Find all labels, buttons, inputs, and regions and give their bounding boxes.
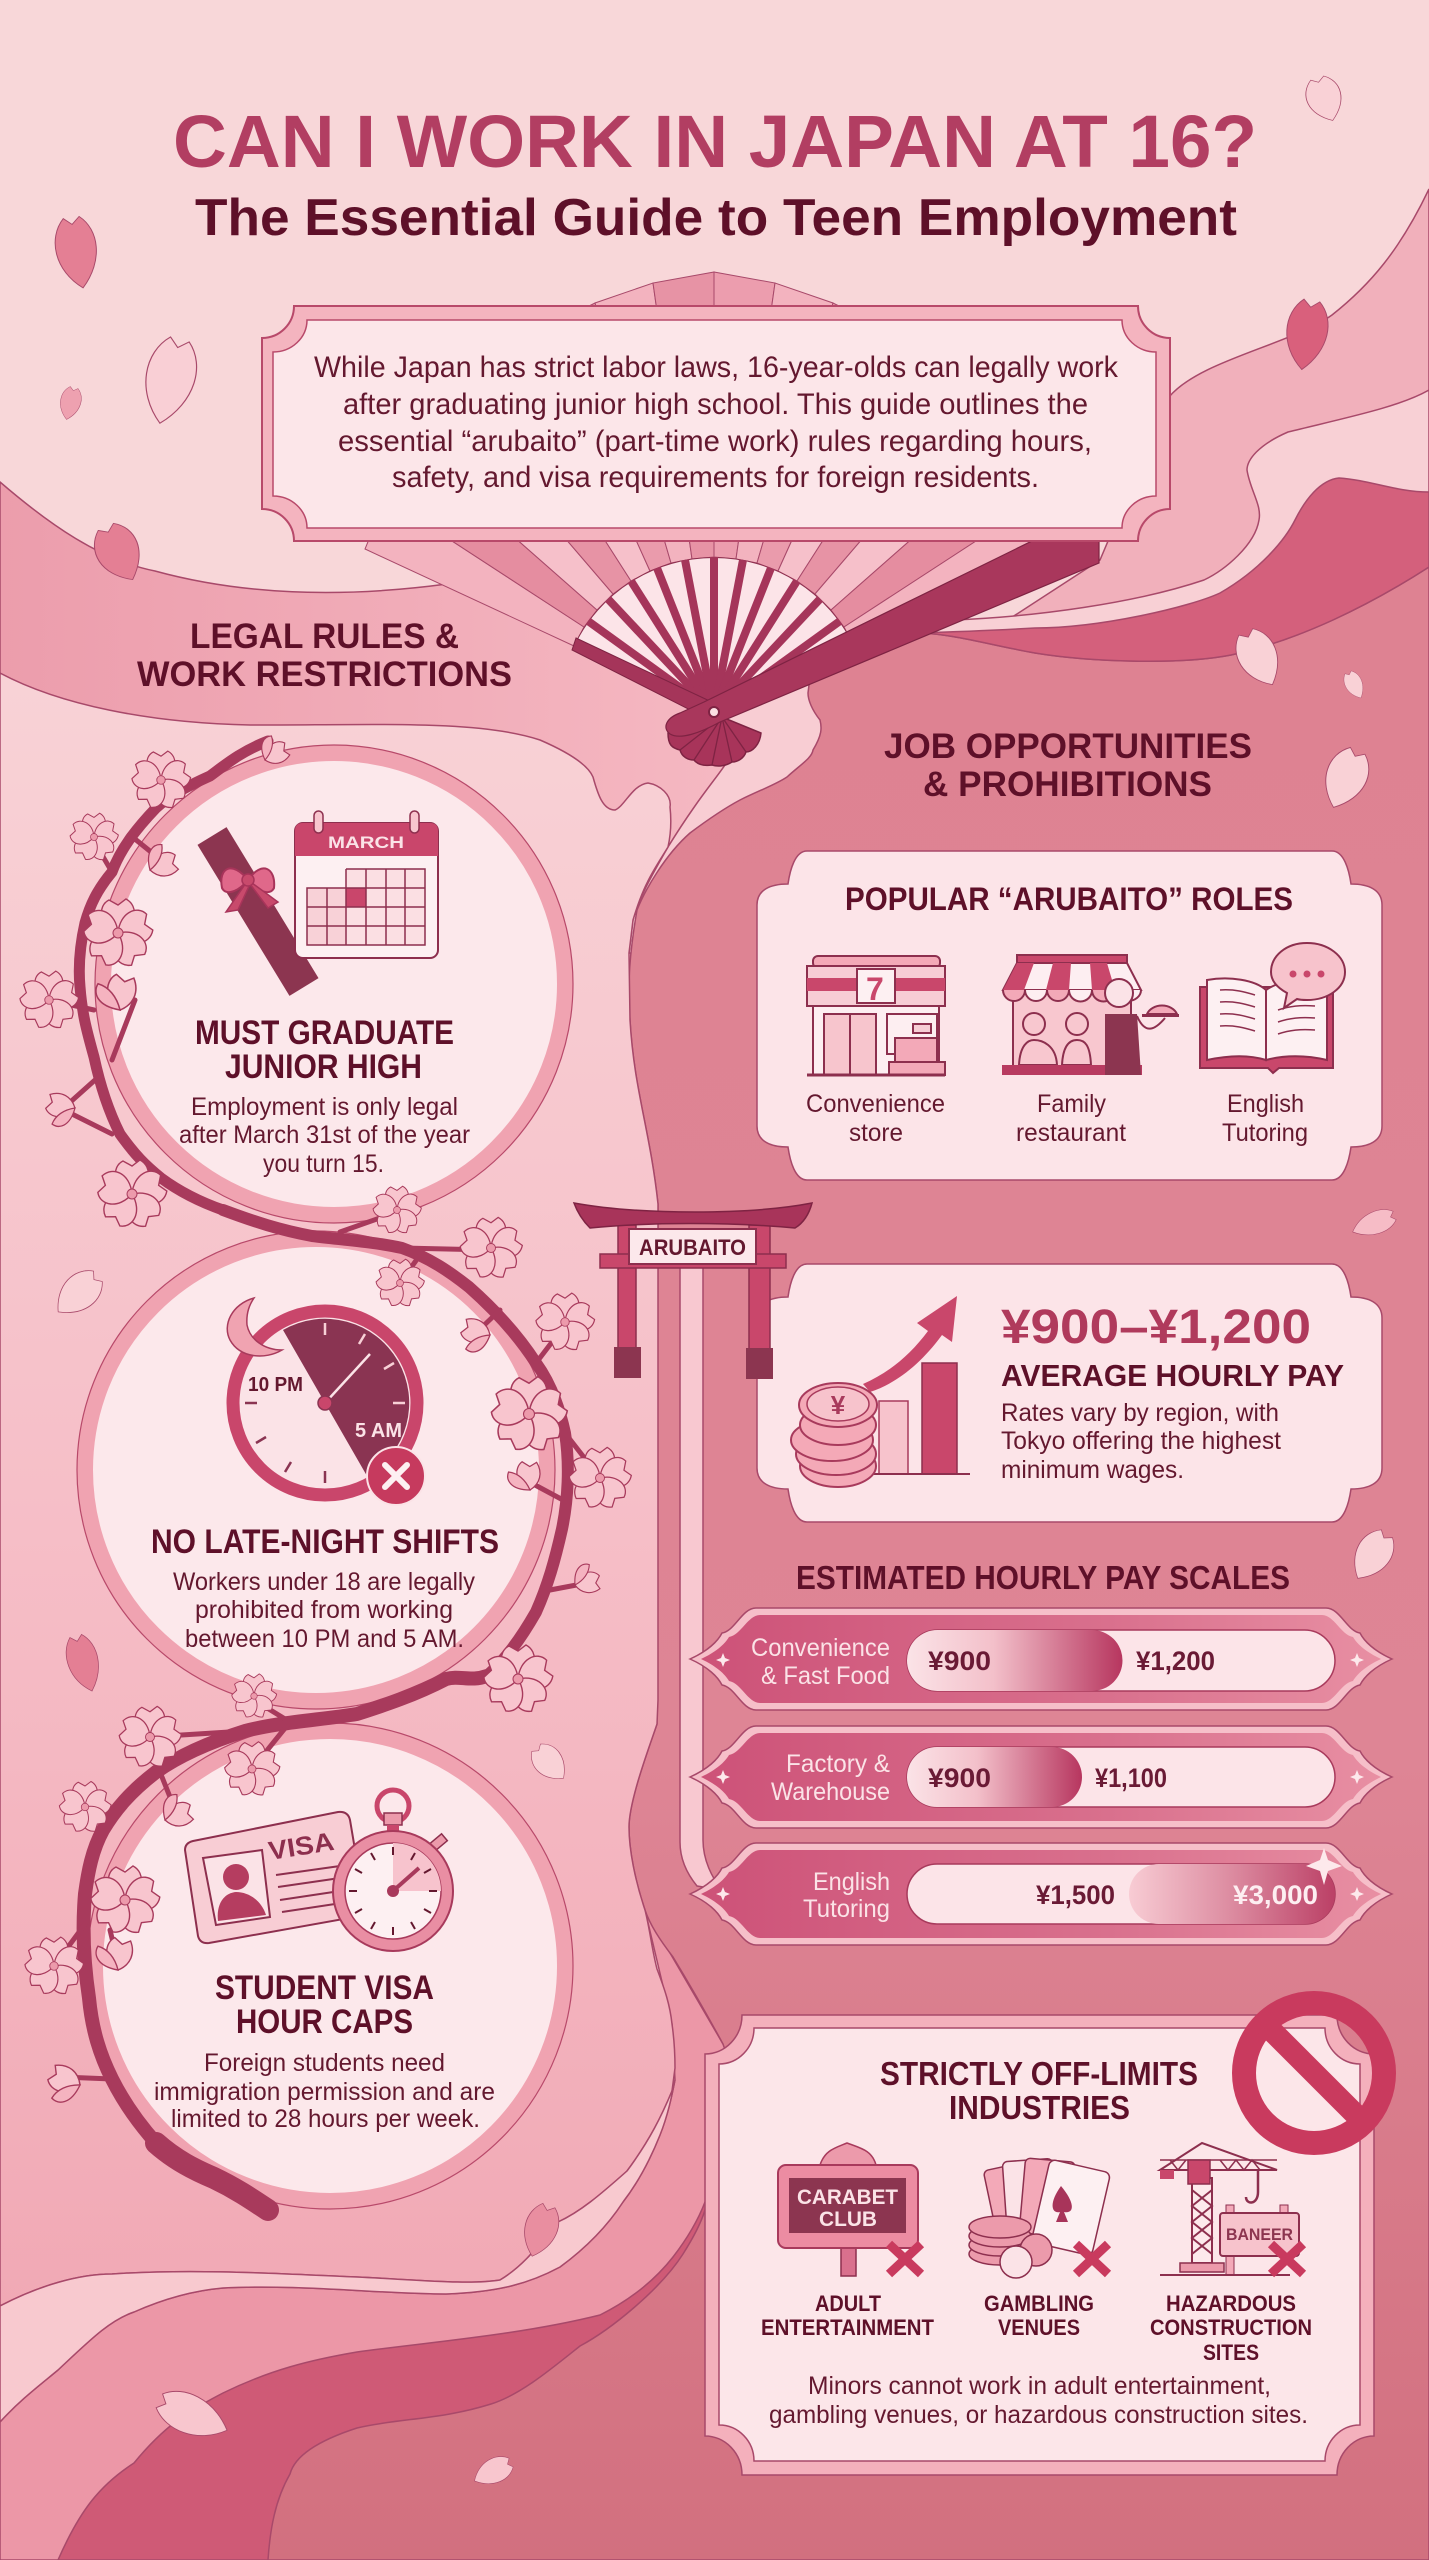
text: student visa: [154, 1969, 495, 2133]
industry labels: SITES: [1203, 2340, 1259, 2365]
intro panel: While Japan has strict labor laws, 16-year-olds can legally work: [314, 351, 1119, 384]
panel: student visa: [87, 1723, 573, 2209]
folding fan: [365, 272, 1099, 766]
role labels: [806, 1090, 1308, 1147]
torii gate: [574, 1203, 812, 1379]
heading: legal rules: [137, 617, 512, 694]
icon: clock: 5 AM: [355, 1420, 402, 1442]
industry labels: ENTERTAINMENT: [761, 2315, 935, 2340]
icon: family restaurant: [1002, 955, 1179, 1075]
pay row: convenience: Convenience: [751, 1634, 890, 1662]
icon: March calendar: MARCH: [328, 833, 404, 852]
pay figures: Rates vary by region, with: [1001, 1399, 1279, 1427]
heading: job opportunities: & PROHIBITIONS: [923, 765, 1212, 804]
blossoms upper: [17, 731, 292, 1231]
pay figures: AVERAGE HOURLY PAY: [1001, 1358, 1344, 1393]
industry labels: HAZARDOUS: [1166, 2291, 1296, 2316]
text: student visa: STUDENT VISA: [215, 1969, 434, 2007]
role labels: Family: [1037, 1090, 1106, 1118]
sparkle: [1306, 1848, 1342, 1885]
pay row: English tutoring: ¥3,000: [1233, 1880, 1318, 1910]
heading: legal rules: LEGAL RULES &: [190, 617, 459, 656]
panel: popular roles: POPULAR “ARUBAITO” ROLES: [845, 881, 1293, 917]
icon: construction crane: BANEER: [1226, 2225, 1293, 2244]
panel: off-limits industries: [705, 2003, 1384, 2475]
icon: clock: [227, 1298, 425, 1505]
pay figures: [1001, 1301, 1344, 1484]
left panel: [0, 673, 675, 2306]
pay row: factory: [690, 1726, 1392, 1828]
pay row: convenience: ¥900: [928, 1646, 991, 1676]
wave: bottom mid band: [0, 1910, 780, 2560]
icon: convenience store: 7: [866, 971, 884, 1007]
intro panel: essential “arubaito” (part-time work) rules regarding hours,: [338, 425, 1092, 458]
text: must graduate: JUNIOR HIGH: [225, 1048, 422, 1086]
wave: top right dark band: [917, 478, 1429, 661]
pay row: factory: ¥900: [928, 1763, 991, 1793]
icon: stopwatch: [333, 1790, 453, 1951]
text: student visa: limited to 28 hours per week.: [171, 2105, 480, 2133]
panel: average hourly pay: [757, 1264, 1382, 1522]
icon: coins and bar chart: [791, 1296, 970, 1487]
icon: open book with speech bubble: [1200, 943, 1345, 1073]
icon: diploma: [212, 836, 304, 987]
note text: [769, 2372, 1308, 2429]
panel heading: STRICTLY OFF-LIMITS: [880, 2055, 1198, 2092]
text: student visa: HOUR CAPS: [236, 2003, 413, 2041]
title: CAN I WORK IN JAPAN AT 16?: [173, 100, 1257, 183]
path strip below torii: [680, 1250, 722, 1890]
text: no late-night shifts: prohibited from working: [195, 1596, 453, 1624]
cherry branch: [17, 731, 634, 2210]
wave: top right pale strip: [917, 390, 1429, 640]
text: student visa: immigration permission and are: [154, 2078, 495, 2106]
icon: cabaret sign: CLUB: [819, 2208, 877, 2231]
pay row: English tutoring: English: [813, 1868, 890, 1896]
role labels: store: [849, 1119, 903, 1147]
wave: left upper band: [0, 482, 725, 900]
pay row: factory: ¥1,100: [1095, 1763, 1167, 1793]
icon: visa card: [185, 1812, 366, 1943]
icon: visa card: VISA: [266, 1826, 336, 1866]
industry labels: ADULT: [815, 2291, 881, 2316]
icon: cabaret sign: [778, 2143, 921, 2276]
text: must graduate: after March 31st of the year: [179, 1121, 470, 1149]
icon: prohibition sign: [1244, 2003, 1384, 2143]
text: student visa: Foreign students need: [204, 2049, 445, 2077]
pay row: convenience: ¥1,200: [1136, 1646, 1215, 1676]
text: no late-night shifts: NO LATE-NIGHT SHIFTS: [151, 1523, 499, 1561]
heading: legal rules: WORK RESTRICTIONS: [137, 655, 512, 694]
pay row: English tutoring: [690, 1843, 1392, 1945]
icon: March calendar: [295, 811, 438, 958]
intro panel: [262, 306, 1170, 541]
pay row: English tutoring: ¥1,500: [1036, 1880, 1115, 1910]
role labels: Convenience: [806, 1090, 945, 1118]
panel heading: [880, 2055, 1198, 2126]
industry labels: [761, 2291, 1312, 2365]
subtitle: The Essential Guide to Teen Employment: [195, 189, 1237, 247]
panel: must graduate: [95, 745, 573, 1223]
icon: gambling cards and chips: [969, 2158, 1111, 2278]
pale area under fan: [629, 633, 917, 960]
industry labels: VENUES: [998, 2315, 1080, 2340]
text: no late-night shifts: between 10 PM and 5 AM.: [185, 1625, 464, 1653]
wave: top right band: [917, 189, 1429, 640]
note text: gambling venues, or hazardous construction sites.: [769, 2401, 1308, 2429]
heading: job opportunities: JOB OPPORTUNITIES: [884, 727, 1252, 766]
pay row: convenience: [690, 1608, 1392, 1710]
panel: popular roles: [757, 851, 1382, 1180]
icon: clock: 10 PM: [248, 1374, 303, 1396]
pay figures: minimum wages.: [1001, 1456, 1184, 1484]
text: must graduate: MUST GRADUATE: [195, 1014, 454, 1052]
text: no late-night shifts: [151, 1523, 499, 1653]
icon: coins and bar chart: ¥: [831, 1390, 846, 1420]
intro panel: after graduating junior high school. This guide outlines the: [343, 388, 1088, 421]
blossoms lower: [22, 1674, 282, 2107]
text: must graduate: Employment is only legal: [191, 1093, 458, 1121]
wave: bottom light strip: [0, 2080, 675, 2422]
pay row: English tutoring: Tutoring: [803, 1895, 890, 1923]
panel heading: INDUSTRIES: [949, 2089, 1130, 2126]
pay row: convenience: & Fast Food: [761, 1662, 890, 1690]
pay figures: Tokyo offering the highest: [1001, 1427, 1281, 1455]
note text: Minors cannot work in adult entertainment,: [808, 2372, 1271, 2400]
heading: job opportunities: [884, 727, 1252, 804]
pay figures: ¥900–¥1,200: [1001, 1301, 1311, 1354]
pay row: factory: Factory &: [786, 1750, 890, 1778]
torii gate: ARUBAITO: [639, 1235, 746, 1260]
icon: construction crane: [1160, 2143, 1303, 2275]
heading: pay scales: ESTIMATED HOURLY PAY SCALES: [796, 1559, 1290, 1596]
industry labels: GAMBLING: [984, 2291, 1094, 2316]
icon: cabaret sign: CARABET: [797, 2186, 898, 2209]
rose right region: [268, 567, 1429, 2560]
blossoms middle: [371, 1186, 634, 1716]
role labels: restaurant: [1016, 1119, 1126, 1147]
role labels: English: [1227, 1090, 1304, 1118]
role labels: Tutoring: [1222, 1119, 1308, 1147]
icon: convenience store: [807, 956, 945, 1075]
wave: bottom dark band: [58, 2200, 780, 2560]
text: no late-night shifts: Workers under 18 are legally: [173, 1568, 475, 1596]
text: must graduate: you turn 15.: [263, 1150, 384, 1178]
industry labels: CONSTRUCTION: [1150, 2315, 1312, 2340]
panel: no late-night shifts: [77, 1231, 555, 1709]
text: must graduate: [179, 1014, 470, 1178]
pay row: factory: Warehouse: [771, 1778, 890, 1806]
intro panel: safety, and visa requirements for foreign residents.: [392, 461, 1039, 494]
